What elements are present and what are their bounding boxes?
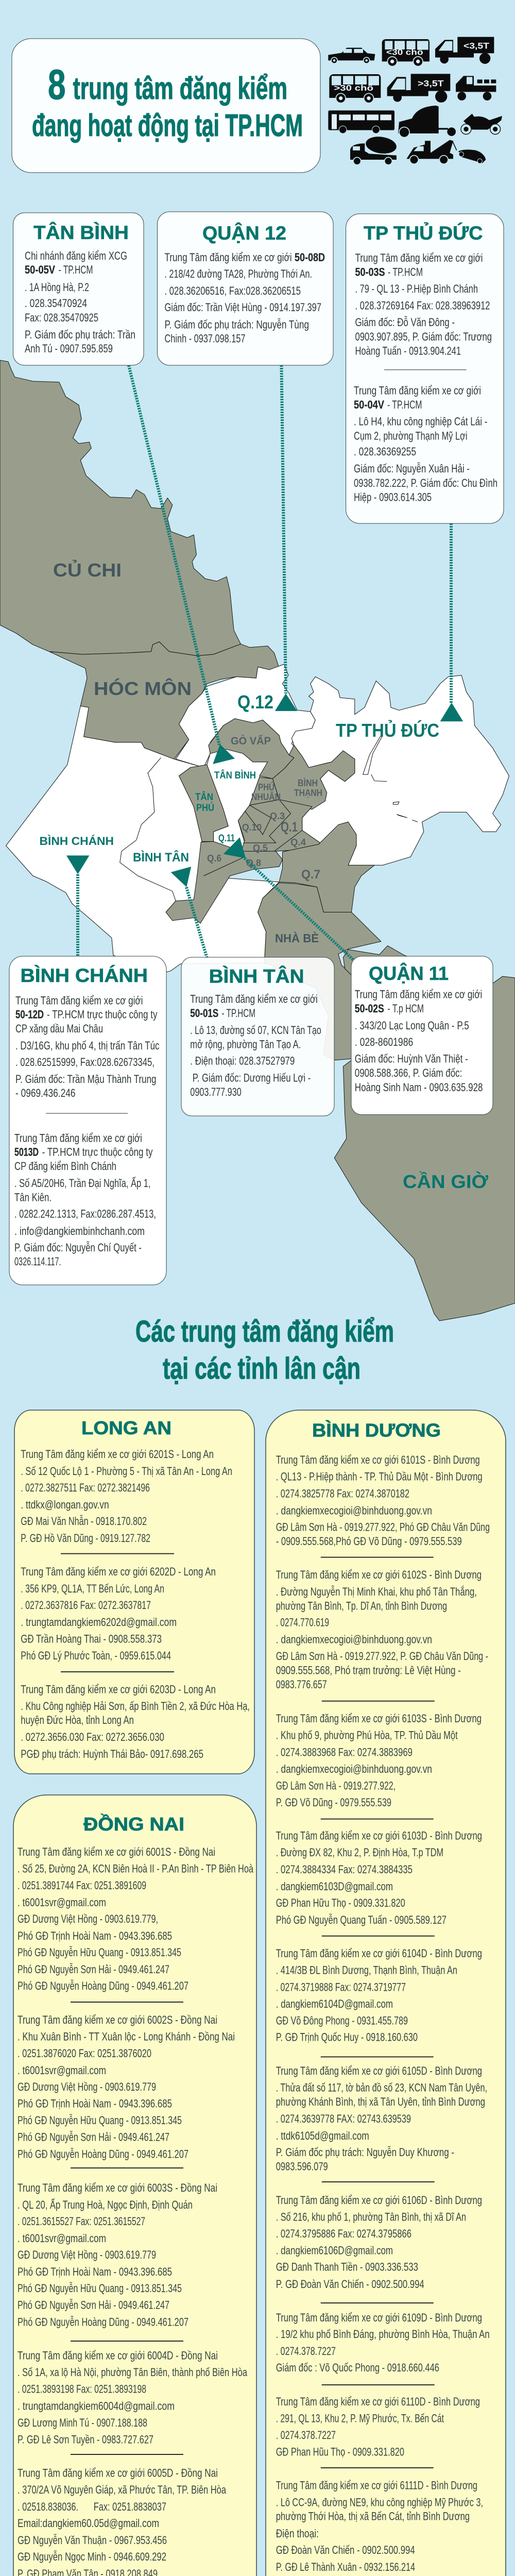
panel: Binh Chanh bbox=[9, 956, 166, 1285]
text block: center 50-05V: P. Giám đốc phụ trách: Trần bbox=[25, 328, 135, 341]
triangle marker: Binh Chanh bbox=[66, 855, 89, 874]
map labels: GÒ VẤP bbox=[231, 735, 271, 747]
map labels: Q.1 bbox=[281, 819, 298, 835]
text block: center 6111D: GĐ Đoàn Văn Chiến - 0902.500.994 bbox=[276, 2544, 415, 2556]
title: 8 bbox=[48, 61, 66, 108]
panel: Quan 11 bbox=[351, 956, 493, 1115]
text block: center 6110D: GĐ Phan Hũu Thọ - 0909.331.820 bbox=[276, 2445, 404, 2459]
text block: center 6106D: . 0274.3795886 Fax: 0274.3795866 bbox=[276, 2227, 411, 2240]
text block: center 6203D: . Khu Công nghiệp Hải Sơn, ấp Bình Tiền 2, xã Đức Hòa Hạ, bbox=[21, 1700, 250, 1713]
text block: center 6001S: GĐ Dương Việt Hồng - 0903.619.779, bbox=[18, 1912, 158, 1925]
text block: center 6109D bbox=[276, 2311, 490, 2374]
district: Hoc Mon bbox=[49, 642, 279, 759]
text block: center 6001S: Phó GĐ Nguyễn Sơn Hải - 0949.461.247 bbox=[18, 1963, 169, 1976]
text block: center 6005D: . 02518.838036. bbox=[18, 2500, 78, 2513]
text block: center 6201S: . 0272.3827511 Fax: 0272.3821496 bbox=[21, 1481, 150, 1494]
text block: center 50-01S: P. Giám đốc: Dương Hiếu Lợi - bbox=[193, 1072, 311, 1084]
title bbox=[32, 61, 303, 143]
map labels: Q.3 bbox=[270, 811, 285, 821]
triangle marker: TP Thu Duc bbox=[440, 703, 463, 721]
text block: center 6103S: P. GĐ Võ Dũng - 0979.555.539 bbox=[276, 1796, 391, 1809]
map labels: CỦ CHI bbox=[53, 559, 122, 581]
icon: bus over 30 seats: >30 chỗ bbox=[334, 83, 373, 93]
text block: center 6003S: Phó GĐ Nguyễn Hoàng Dũng - 0949.461.207 bbox=[18, 2315, 188, 2329]
text block: center 6110D: . 0274.378.7227 bbox=[276, 2429, 336, 2442]
title panel bbox=[12, 39, 320, 173]
district: Tan Binh and Q.11 land bbox=[207, 749, 268, 851]
heading: Binh Tan: BÌNH TÂN bbox=[209, 965, 304, 987]
text block: center 6103S: . dangkiemxecogioi@binhduong.gov.vn bbox=[276, 1762, 432, 1775]
text block: center 50-12D: . D3/16G, khu phố 4, thị trấn Tân Túc bbox=[15, 1039, 160, 1052]
text block: center 50-05V: 50-05V bbox=[25, 263, 55, 276]
map labels: BÌNH TÂN bbox=[133, 850, 189, 865]
map labels: Q.10 bbox=[242, 822, 262, 833]
text block: center 50-12D: CP xăng dầu Mai Châu bbox=[15, 1022, 103, 1035]
text block: center 6003S: . 0251.3615527 Fax: 0251.3615527 bbox=[18, 2215, 145, 2228]
text block: center 6203D bbox=[21, 1683, 250, 1760]
text block: center 50-12D: - 0969.436.246 bbox=[15, 1087, 75, 1099]
icon: truck over 3.5 tons bbox=[387, 74, 450, 103]
map labels: Q.11 bbox=[218, 833, 235, 844]
icon: truck under 3.5 tons bbox=[435, 37, 494, 64]
text block: center 6001S: Trung Tâm đăng kiểm xe cơ giới 6001S - Đồng Nai bbox=[18, 1845, 215, 1858]
text block: center 50-03S: Hoàng Tuấn - 0913.904.241 bbox=[355, 344, 461, 358]
icon: bus under 30 seats: <30 chỗ bbox=[386, 47, 423, 57]
text block: center 50-02S: . 343/20 Lạc Long Quân - P.5 bbox=[355, 1019, 469, 1032]
map labels: PHÚ bbox=[196, 802, 214, 814]
text block: center 6002S: Phó GĐ Nguyễn Sơn Hải - 0949.461.247 bbox=[18, 2131, 169, 2144]
text block: center 5013D: 0326.114.117. bbox=[14, 1255, 61, 1268]
text block: center 50-04V: Hiệp - 0903.614.305 bbox=[354, 490, 432, 504]
text block: center 50-04V: Giám đốc: Nguyễn Xuân Hải - bbox=[354, 462, 470, 475]
text block: center 6003S: Phó GĐ Nguyễn Sơn Hải - 0949.461.247 bbox=[18, 2299, 169, 2311]
text block: center 50-04V: Cụm 2, phường Thạnh Mỹ Lợi bbox=[354, 430, 468, 442]
text block: center 6001S: . 0251.3891744 Fax: 0251.3891609 bbox=[18, 1879, 146, 1892]
text block: center 6103D: . Đường ĐX 82, Khu 2, P. Định Hòa, T.p TDM bbox=[276, 1846, 443, 1859]
text block: center 6103S: . 0274.3883968 Fax: 0274.3883969 bbox=[276, 1746, 413, 1759]
text block: center 6005D bbox=[18, 2467, 227, 2576]
district: Cu Chi bbox=[0, 360, 241, 656]
text block: center 6202D: . trungtamdangkiem6202d@gmail.com bbox=[21, 1616, 177, 1629]
text block: center 6105D: . ttdk6105d@gmail.com bbox=[276, 2129, 369, 2142]
text block: center 50-12D: . 028.62515999, Fax:028.62673345, bbox=[15, 1056, 154, 1069]
text block: center 50-05V: Chi nhánh đăng kiểm XCG bbox=[25, 249, 127, 262]
text block: center 50-05V: . 028.35470924 bbox=[25, 297, 87, 310]
text block: center 50-01S: - TP.HCM bbox=[221, 1007, 255, 1020]
heading: nearby provinces bbox=[135, 1315, 394, 1385]
text block: center 50-12D: - TP.HCM trực thuộc công ty bbox=[47, 1008, 158, 1021]
map labels: NHÀ BÈ bbox=[275, 931, 319, 945]
text block: center 6002S: . t6001svr@gmail.com bbox=[18, 2064, 106, 2077]
icon: concrete mixer bbox=[350, 135, 398, 165]
title: trung tâm đăng kiểm bbox=[73, 71, 287, 106]
text block: center 6203D: Trung Tâm đăng kiểm xe cơ giới 6203D - Long An bbox=[21, 1683, 216, 1696]
text block: center 50-08D: Chinh - 0937.098.157 bbox=[165, 332, 245, 345]
text block: center 50-03S: Giám đốc: Đỗ Văn Đông - bbox=[355, 316, 455, 329]
inner districts Q.1 Q.3 Q.4 Q.5 Q.6 Q.8 Q.10 bbox=[166, 800, 320, 923]
text block: center 50-03S: - TP.HCM bbox=[388, 266, 423, 279]
text block: center 6104D: P. GĐ Trịnh Quốc Huy - 0918.160.630 bbox=[276, 2031, 418, 2043]
text block: center 6001S: Phó GĐ Trịnh Hoài Nam - 0943.396.685 bbox=[18, 1929, 172, 1942]
heading: nearby provinces: tại các tỉnh lân cận bbox=[163, 1352, 360, 1385]
district: Binh Chanh and Binh Tan land bbox=[6, 706, 279, 972]
text block: center 6106D bbox=[276, 2194, 482, 2291]
text block: center 50-02S: . 028-8601986 bbox=[355, 1036, 413, 1048]
map labels: THẠNH bbox=[294, 788, 322, 798]
text block: center 6002S: GĐ Dương Việt Hồng - 0903.619.779 bbox=[18, 2080, 156, 2093]
triangle marker: Binh Tan bbox=[171, 867, 191, 887]
text block: center 6005D: Trung Tâm đăng kiểm xe cơ giới 6005D - Đồng Nai bbox=[18, 2467, 218, 2480]
text block: center 6005D: GĐ Nguyễn Văn Thuận - 0967.953.456 bbox=[18, 2534, 167, 2547]
text block: center 6103S: GĐ Lâm Sơn Hà - 0919.277.922, bbox=[276, 1780, 396, 1792]
text block: center 6104D: GĐ Võ Đông Phong - 0931.455.789 bbox=[276, 2014, 408, 2027]
triangle marker: Q.11 bbox=[224, 837, 246, 858]
text block: center 50-08D: . 028.36206516, Fax:028.36206515 bbox=[165, 284, 301, 297]
text block: center 6101S: . 0274.3825778 Fax: 0274.3870182 bbox=[276, 1487, 409, 1500]
text block: center 6109D: . 0274.378.7227 bbox=[276, 2345, 336, 2358]
text block: center 5013D: Trung Tâm đăng kiểm xe cơ giới bbox=[14, 1132, 142, 1145]
text block: center 6103S bbox=[276, 1712, 482, 1809]
text block: center 6110D bbox=[276, 2395, 480, 2459]
text block: center 50-12D: P. Giám đốc: Trần Mậu Thành Trung bbox=[15, 1073, 157, 1086]
text block: center 50-08D: 50-08D bbox=[295, 251, 325, 264]
text block: center 6001S bbox=[18, 1845, 254, 1992]
text block: center 6002S bbox=[18, 2013, 235, 2161]
text block: center 6102S: 0909.555.568, Phó trạm trưởng: Lê Việt Hùng - bbox=[276, 1664, 461, 1677]
text block: center 6106D: P. GĐ Đoàn Văn Chiến - 0902.500.994 bbox=[276, 2278, 424, 2291]
text block: center 50-02S: 0908.588.366, P. Giám đốc: bbox=[355, 1066, 462, 1079]
icon: truck over 3.5 tons: >3,5T bbox=[418, 78, 444, 88]
icon: car bbox=[328, 48, 375, 63]
map labels: BÌNH bbox=[298, 777, 318, 788]
text block: center 50-04V: 50-04V bbox=[354, 398, 384, 411]
text block: center 50-12D: 50-12D bbox=[15, 1008, 44, 1021]
text block: center 6004D: Trung Tâm đăng kiểm xe cơ giới 6004D - Đồng Nai bbox=[18, 2349, 218, 2362]
heading: Long An: LONG AN bbox=[81, 1417, 171, 1438]
text block: center 50-08D bbox=[165, 251, 325, 345]
text block: center 6002S: Phó GĐ Nguyễn Hữu Quang - 0913.851.345 bbox=[18, 2114, 182, 2127]
map labels: HÓC MÔN bbox=[94, 677, 192, 699]
icons: vehicle silhouettes bbox=[328, 37, 502, 165]
district: Can Gio bbox=[334, 946, 515, 1321]
text block: center 6002S: Phó GĐ Trịnh Hoài Nam - 0943.396.685 bbox=[18, 2097, 172, 2110]
district: Tan Phu bbox=[179, 765, 228, 841]
text block: center 6105D: 0983.596.079 bbox=[276, 2160, 328, 2173]
text block: center 6004D: GĐ Lương Minh Tú - 0907.188.188 bbox=[18, 2416, 147, 2429]
text block: center 50-08D: Trung Tâm đăng kiểm xe cơ giới bbox=[165, 251, 291, 264]
text block: center 50-02S bbox=[355, 988, 483, 1094]
text block: center 50-04V bbox=[354, 384, 497, 504]
map labels: Q.12 bbox=[237, 691, 273, 713]
text block: center 6003S: Phó GĐ Trịnh Hoài Nam - 0943.396.685 bbox=[18, 2265, 172, 2278]
panel: Dong Nai bbox=[13, 1795, 256, 2576]
text block: center 6111D: Điện thoại: bbox=[276, 2527, 319, 2540]
panel: Long An bbox=[14, 1410, 254, 1774]
text block: center 6002S: Trung Tâm đăng kiểm xe cơ giới 6002S - Đồng Nai bbox=[18, 2013, 217, 2026]
text block: center 5013D: P. Giám đốc: Nguyễn Chí Quyết - bbox=[14, 1241, 142, 1254]
panel: Binh Tan bbox=[181, 957, 334, 1116]
text block: center 50-01S: 50-01S bbox=[190, 1007, 218, 1020]
text block: center 50-04V: - TP.HCM bbox=[387, 398, 422, 411]
text block: center 6109D: Giám đốc : Võ Quốc Phong - 0918.660.446 bbox=[276, 2361, 439, 2374]
text block: center 6110D: . 291, QL 13, Khu 2, P. Mỹ Phước, Tx. Bến Cát bbox=[276, 2412, 444, 2425]
icon: tow truck bbox=[406, 140, 486, 164]
district: Binh Thanh bbox=[272, 745, 355, 809]
text block: center 50-05V: Fax: 028.35470925 bbox=[25, 311, 98, 324]
text block: center 6111D: P. GĐ Lê Thành Xuân - 0932.156.214 bbox=[276, 2561, 415, 2573]
map labels: Q.8 bbox=[246, 858, 261, 868]
panel: Quan 12 bbox=[158, 212, 333, 365]
text block: center 6201S: Trung Tâm đăng kiểm xe cơ giới 6201S - Long An bbox=[21, 1448, 214, 1461]
text block: center 6203D: . 0272.3656.030 Fax: 0272.3656.030 bbox=[21, 1731, 164, 1743]
text block: center 5013D bbox=[14, 1132, 156, 1268]
text block: center 50-01S: . Lô 13, đường số 07, KCN Tân Tạo bbox=[190, 1024, 321, 1037]
text block: center 50-01S bbox=[190, 993, 321, 1098]
text block: center 5013D: . Số A5/20H6, Trần Đại Nghĩa, Ấp 1, bbox=[14, 1177, 150, 1190]
triangle marker: Tan Binh bbox=[213, 744, 235, 764]
map of Ho Chi Minh City districts bbox=[0, 360, 515, 1321]
text block: center 6105D: P. Giám đốc phụ trách: Nguyễn Duy Khương - bbox=[276, 2146, 454, 2159]
text block: center 50-03S: 50-03S bbox=[355, 266, 385, 279]
text block: center 50-02S: - T.p HCM bbox=[387, 1002, 424, 1015]
text block: center 6104D: . 414/3B ĐL Bình Dương, Thạnh Bình, Thuận An bbox=[276, 1963, 457, 1976]
text block: center 5013D: . info@dangkiembinhchanh.com bbox=[14, 1225, 145, 1238]
text block: center 6202D: GĐ Trần Hoàng Thai - 0908.558.373 bbox=[21, 1632, 162, 1646]
text block: center 50-01S: mở rộng, phường Tân Tạo A. bbox=[190, 1038, 301, 1050]
panel: Tan Binh bbox=[13, 213, 144, 365]
text block: center 6203D: PGĐ phụ trách: Huỳnh Thái Bảo- 0917.698.265 bbox=[21, 1748, 203, 1760]
text block: center 6103D: GĐ Phan Hữu Thọ - 0909.331.820 bbox=[276, 1896, 405, 1909]
text block: center 6102S: 0983.776.657 bbox=[276, 1678, 327, 1691]
text block: center 6002S: Phó GĐ Nguyễn Hoàng Dũng - 0949.461.207 bbox=[18, 2148, 188, 2161]
map labels: TÂN bbox=[195, 791, 213, 803]
rivers inside Thu Duc bbox=[363, 735, 418, 822]
title: đang hoạt động tại TP.HCM bbox=[32, 108, 303, 143]
map labels: Q.4 bbox=[290, 837, 306, 848]
text block: center 6101S bbox=[276, 1453, 490, 1548]
heading: Dong Nai: ĐỒNG NAI bbox=[83, 1813, 184, 1835]
text block: center 6201S bbox=[21, 1448, 232, 1545]
text block: center 50-01S: Trung Tâm đăng kiểm xe cơ giới bbox=[190, 993, 318, 1006]
district: Q.12 bbox=[176, 664, 315, 768]
map labels: TP THỦ ĐỨC bbox=[336, 719, 439, 741]
map labels bbox=[39, 559, 488, 1192]
text block: center 50-08D: Giám đốc: Trần Việt Hùng - 0914.197.397 bbox=[165, 301, 321, 314]
text block: center 50-01S: . Điện thoại: 028.37527979 bbox=[190, 1054, 295, 1067]
text block: center 6103D: Phó GĐ Nguyễn Quang Tuấn - 0905.589.127 bbox=[276, 1913, 447, 1926]
map labels: Q.7 bbox=[301, 868, 320, 882]
text block: center 6106D: . dangkiem6106D@gmail.com bbox=[276, 2244, 393, 2257]
text block: center 6003S: Phó GĐ Nguyễn Hữu Quang - 0913.851.345 bbox=[18, 2282, 182, 2295]
heading: Tan Binh: TÂN BÌNH bbox=[33, 222, 129, 243]
text block: center 6003S: . QL 20, Ấp Trung Hoà, Ngọc Định, Định Quán bbox=[18, 2198, 193, 2211]
text block: center 6001S: Phó GĐ Nguyễn Hữu Quang - 0913.851.345 bbox=[18, 1946, 181, 1959]
text block: center 6003S: GĐ Dương Việt Hồng - 0903.619.779 bbox=[18, 2248, 156, 2261]
text block: center 6102S bbox=[276, 1568, 488, 1691]
text block: center 5013D: . 0282.242.1313, Fax:0286.287.4513, bbox=[14, 1208, 156, 1220]
connectors from panels to map markers bbox=[78, 365, 451, 960]
text block: center 50-12D: Trung Tâm đăng kiểm xe cơ giới bbox=[15, 994, 143, 1007]
text block: center 5013D: 5013D bbox=[14, 1146, 39, 1159]
text block: center 6005D: . 370/2A Võ Nguyên Giáp, xã Phước Tân, TP. Biên Hòa bbox=[18, 2483, 227, 2496]
text block: center 50-02S: 50-02S bbox=[355, 1002, 384, 1015]
icon: truck under 3.5 tons: <3,5T bbox=[464, 41, 489, 50]
text block: center 6004D: P. GĐ Lê Sơn Tuyền - 0983.727.627 bbox=[18, 2433, 153, 2446]
text block: center 6103D bbox=[276, 1829, 482, 1926]
text block: center 6005D: GĐ Nguyễn Ngọc Minh - 0946.609.292 bbox=[18, 2550, 166, 2563]
text block: center 6103S: . Khu phố 9, phường Phú Hòa, TP. Thủ Dầu Một bbox=[276, 1729, 458, 1741]
icon: bus under 30 seats bbox=[382, 39, 430, 66]
text block: center 6001S: Phó GĐ Nguyễn Hoàng Dũng - 0949.461.207 bbox=[18, 1979, 188, 1992]
text block: center 6101S: - 0909.555.568,Phó GĐ Võ Dũng - 0979.555.539 bbox=[276, 1535, 462, 1548]
text block: center 50-05V: - TP.HCM bbox=[59, 263, 93, 276]
icon: semi tractor bbox=[398, 106, 456, 138]
text block: center 50-05V: . 1A Hồng Hà, P.2 bbox=[25, 281, 89, 294]
text block: center 6004D bbox=[18, 2349, 248, 2446]
text block: center 50-12D bbox=[15, 994, 160, 1099]
panel: Binh Duong bbox=[266, 1410, 506, 2576]
map labels: PHÚ bbox=[258, 782, 274, 792]
icon: flatbed truck bbox=[456, 76, 496, 100]
text block: center 6202D: . 0272.3637816 Fax: 0272.3637817 bbox=[21, 1599, 151, 1612]
panel: TP Thu Duc bbox=[346, 214, 504, 523]
map labels: TÂN BÌNH bbox=[214, 770, 256, 781]
text block: center 6201S: . Số 12 Quốc Lộ 1 - Phường 5 - Thị xã Tân An - Long An bbox=[21, 1465, 232, 1478]
text block: center 50-01S: 0903.777.930 bbox=[190, 1086, 242, 1098]
map labels: NHUẬN bbox=[251, 791, 281, 802]
map labels: CẦN GIỜ bbox=[403, 1171, 488, 1192]
text block: center 6104D bbox=[276, 1947, 482, 2043]
text block: center 6001S: . Số 25, Đường 2A, KCN Biên Hoà II - P.An Bình - TP Biên Hoà bbox=[18, 1862, 254, 1875]
map labels: Q.6 bbox=[207, 853, 221, 863]
text block: center 6202D bbox=[21, 1565, 216, 1662]
text block: center 6111D bbox=[276, 2479, 483, 2573]
district: Go Vap bbox=[209, 719, 294, 778]
text block: center 6003S: . t6001svr@gmail.com bbox=[18, 2232, 106, 2245]
district: Phu Nhuan bbox=[250, 777, 279, 805]
text block: center 6004D: . trungtamdangkiem6004d@gmail.com bbox=[18, 2400, 175, 2413]
text block: center 50-08D: P. Giám đốc phụ trách: Nguyễn Tùng bbox=[165, 318, 309, 331]
text block: center 50-02S: Giám đốc: Huỳnh Văn Thiệt - bbox=[355, 1053, 468, 1065]
district: Nha Be bbox=[258, 883, 381, 1060]
text block: center 50-05V: Anh Tú - 0907.595.859 bbox=[25, 342, 113, 355]
text block: center 6104D: . dangkiem6104D@gmail.com bbox=[276, 1997, 393, 2010]
text block: center 5013D: Tân Kiên. bbox=[14, 1191, 52, 1204]
district: TP Thu Duc bbox=[291, 675, 509, 865]
boundary: Binh Chanh and Binh Tan bbox=[120, 758, 176, 912]
text block: center 6102S: . dangkiemxecogioi@binhduong.gov.vn bbox=[276, 1633, 432, 1646]
heading: nearby provinces: Các trung tâm đăng kiểm bbox=[135, 1315, 394, 1348]
text block: center 6001S: . t6001svr@gmail.com bbox=[18, 1896, 106, 1909]
inner district boundaries bbox=[203, 800, 302, 876]
text block: center 6201S: P. GĐ Hồ Văn Dũng - 0919.127.782 bbox=[21, 1532, 150, 1545]
icon: motorcycle bbox=[461, 114, 502, 134]
text block: center 6102S: . 0274.770.619 bbox=[276, 1616, 329, 1629]
heading: Binh Duong: BÌNH DƯƠNG bbox=[312, 1420, 441, 1440]
heading: Quan 12: QUẬN 12 bbox=[202, 222, 286, 244]
triangle marker: Q.12 bbox=[275, 693, 297, 711]
text block: center 6203D: huyện Đức Hòa, tỉnh Long An bbox=[21, 1714, 134, 1726]
text block: center 6106D: GĐ Danh Thanh Tiền - 0903.336.533 bbox=[276, 2261, 418, 2274]
map labels: Q.5 bbox=[253, 843, 268, 853]
heading: Binh Chanh: BÌNH CHÁNH bbox=[21, 965, 148, 986]
heading: TP Thu Duc: TP THỦ ĐỨC bbox=[364, 222, 483, 244]
text block: center 6105D: . 0274.3639778 FAX: 02743.639539 bbox=[276, 2112, 411, 2125]
text block: center 6005D: Fax: 0251.8838037 bbox=[94, 2500, 166, 2513]
text block: center 6003S bbox=[18, 2181, 217, 2329]
text block: center 6103D: . 0274.3884334 Fax: 0274.3884335 bbox=[276, 1863, 413, 1876]
text block: center 6202D: Phó GĐ Lý Phước Toàn, - 0959.615.044 bbox=[21, 1649, 171, 1662]
text block: center 6202D: Trung Tâm đăng kiểm xe cơ giới 6202D - Long An bbox=[21, 1565, 216, 1578]
text block: center 6002S: . Khu Xuân Bình - TT Xuân lộc - Long Khánh - Đồng Nai bbox=[18, 2030, 235, 2043]
text block: center 6202D: . 356 KP9, QL1A, TT Bến Lức, Long An bbox=[21, 1582, 164, 1595]
text block: center 50-08D: . 218/42 đường TA28, Phường Thới An. bbox=[165, 267, 312, 280]
text block: center 50-05V bbox=[25, 249, 135, 355]
text block: center 50-04V: . 028.36369255 bbox=[354, 445, 416, 458]
icon: bus over 30 seats bbox=[329, 74, 381, 103]
district: Q.7 bbox=[279, 822, 374, 912]
text block: center 6005D: Email:dangkiem60.05d@gmail.com bbox=[18, 2517, 159, 2530]
text block: center 6101S: . dangkiemxecogioi@binhduong.gov.vn bbox=[276, 1504, 432, 1517]
text block: center 50-03S bbox=[355, 251, 492, 358]
text block: center 6201S: GĐ Mai Văn Nhẫn - 0918.170.802 bbox=[21, 1515, 147, 1528]
heading: Quan 11: QUẬN 11 bbox=[369, 962, 449, 984]
text block: center 6103D: . dangkiem6103D@gmail.com bbox=[276, 1880, 393, 1893]
text block: center 6004D: . Số 1A, xa lộ Hà Nội, phường Tân Biên, thành phố Biên Hòa bbox=[18, 2366, 248, 2379]
text block: center 6004D: . 0251.3893198 Fax: 0251.3893198 bbox=[18, 2383, 146, 2396]
icon: long bus bbox=[328, 110, 394, 133]
text block: center 6102S: phường Tân Bình, Tp. Dĩ An, tỉnh Bình Dương bbox=[276, 1599, 447, 1613]
text block: center 6104D: . 0274.3719888 Fax: 0274.3719777 bbox=[276, 1980, 406, 1994]
text block: center 6002S: . 0251.3876020 Fax: 0251.3876020 bbox=[18, 2047, 151, 2060]
map labels: BÌNH CHÁNH bbox=[39, 835, 114, 848]
text block: center 6003S: Trung Tâm đăng kiểm xe cơ giới 6003S - Đồng Nai bbox=[18, 2181, 217, 2194]
text block: center 6201S: . ttdkx@longan.gov.vn bbox=[21, 1498, 109, 1511]
text block: center 5013D: - TP.HCM trực thuộc công ty bbox=[42, 1146, 153, 1159]
text block: center 5013D: CP đăng kiểm Bình Chánh bbox=[14, 1160, 116, 1173]
text block: center 6105D bbox=[276, 2064, 487, 2173]
